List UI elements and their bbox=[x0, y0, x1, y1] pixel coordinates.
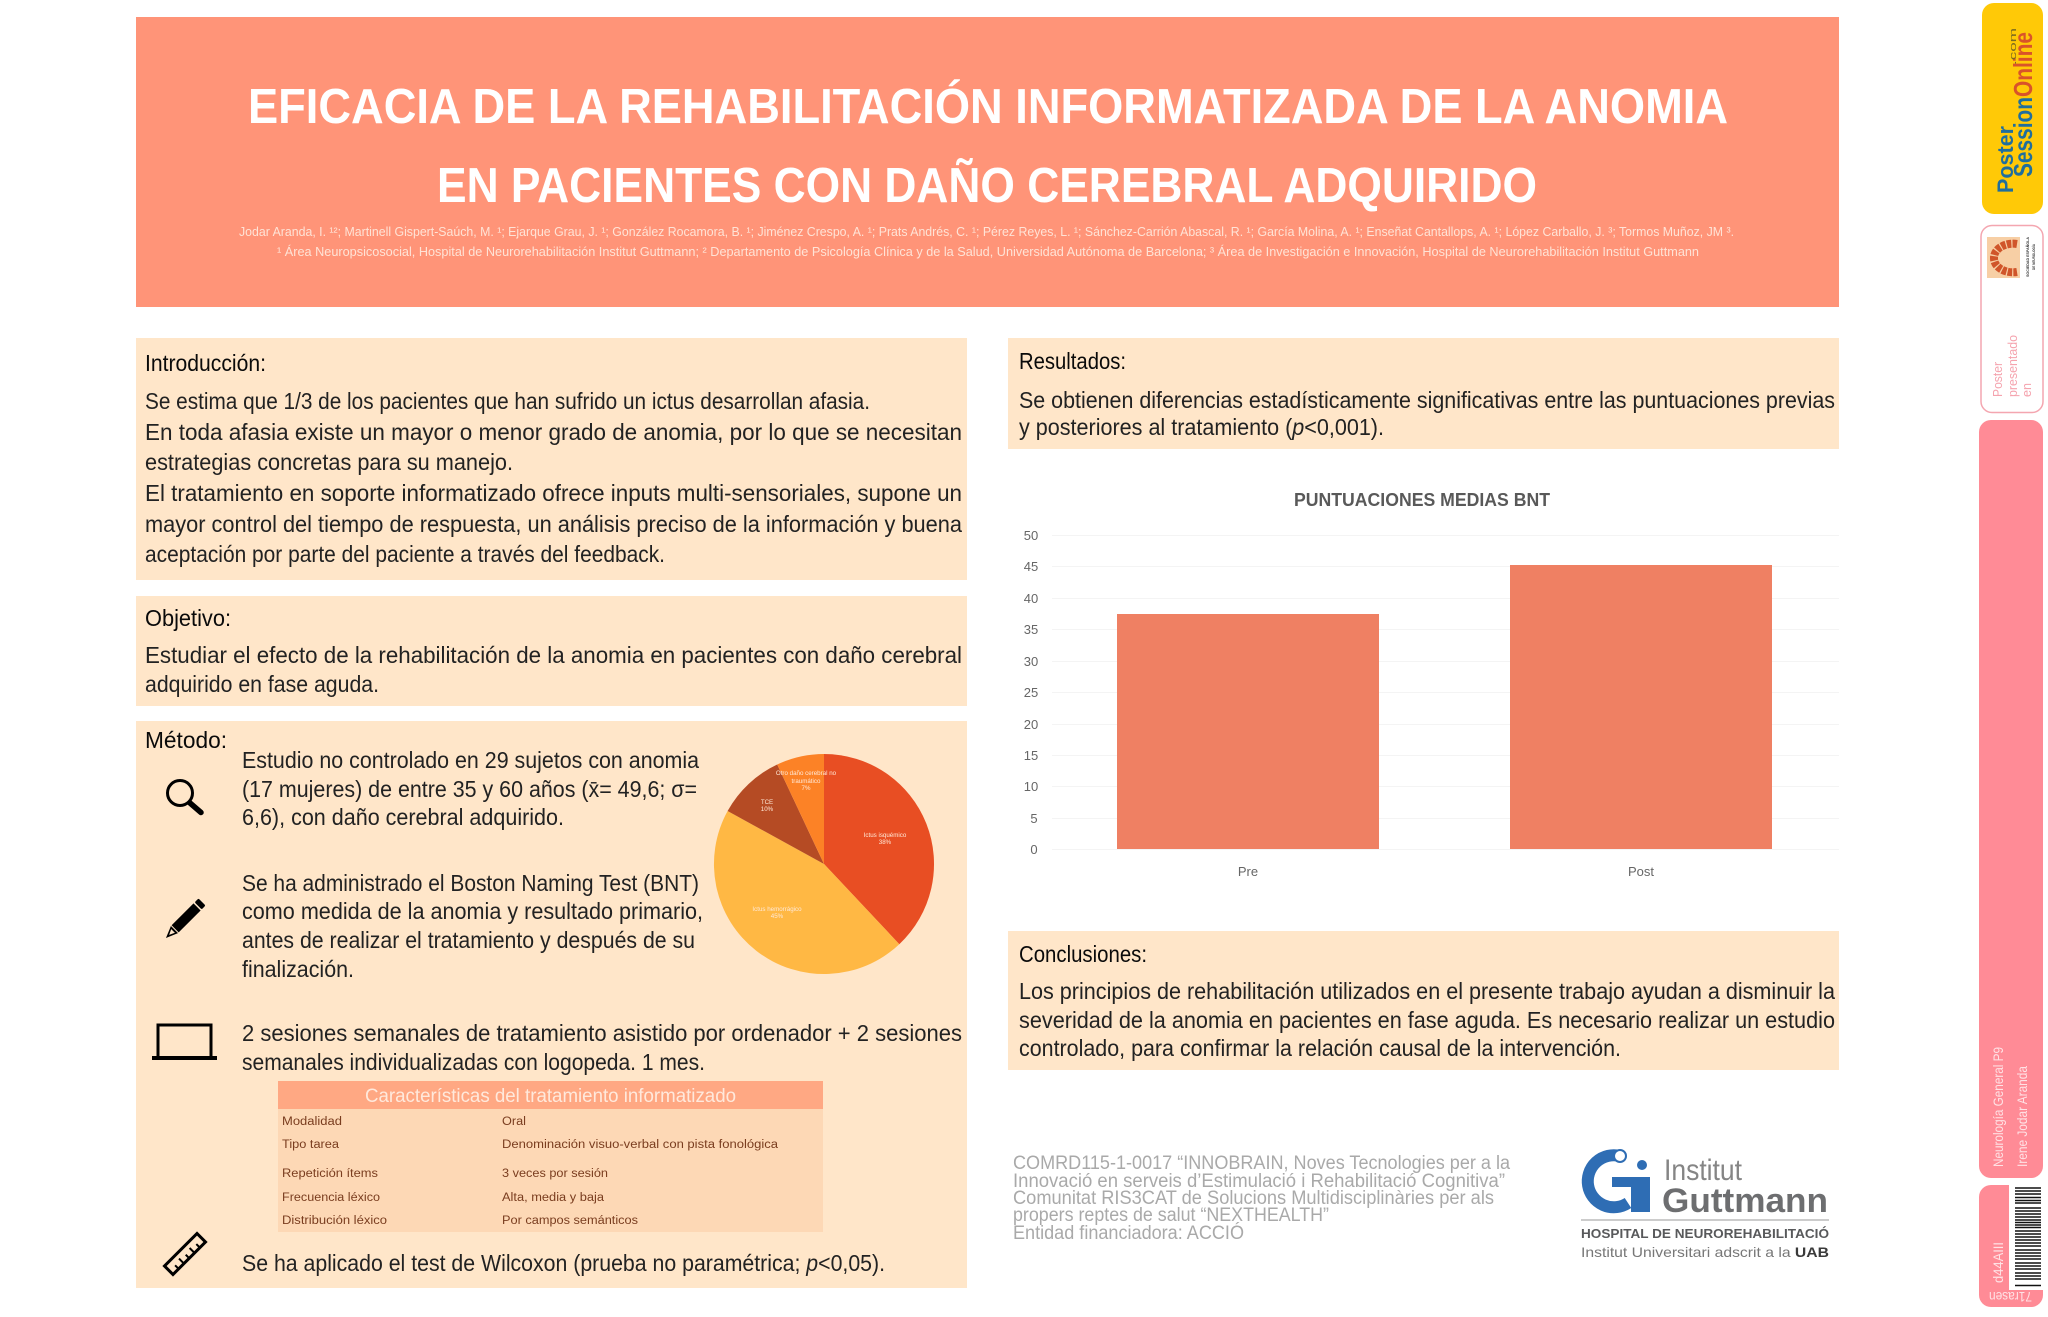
text: boston naming test bbox=[242, 870, 703, 982]
table: características del tratamiento: Frecuencia léxico bbox=[282, 1192, 380, 1204]
text: introducción: mayor control del tiempo de respuesta, un análisis preciso de la información y buena bbox=[145, 511, 962, 537]
pie chart: etiología: 38% bbox=[879, 839, 892, 846]
pie chart: etiología: Otro daño cerebral no bbox=[776, 770, 837, 777]
text: conclusiones: Los principios de rehabilitación utilizados en el presente trabajo ayudan a disminuir la bbox=[1019, 978, 1835, 1004]
title: EN PACIENTES CON DAÑO CEREBRAL ADQUIRIDO bbox=[437, 159, 1537, 213]
table: características del tratamiento: Repetición ítems bbox=[282, 1168, 378, 1180]
sidebar: poster presentado en: en bbox=[2019, 383, 2034, 397]
y axis labels: 15 bbox=[1024, 748, 1038, 763]
funding text bbox=[1013, 1153, 1510, 1244]
funding text: propers reptes de salut “NEXTHEALTH” bbox=[1013, 1205, 1329, 1226]
sidebar: poster session online logo: Session bbox=[2008, 97, 2038, 177]
text: introducción: El tratamiento en soporte informatizado ofrece inputs multi-sensoriales, supone un bbox=[145, 480, 962, 506]
sidebar: session and author bbox=[1979, 420, 2043, 1178]
text: introducción: En toda afasia existe un mayor o menor grado de anomia, por lo que se necesitan bbox=[145, 419, 962, 445]
text: sesiones bbox=[242, 1020, 962, 1075]
bar chart: puntuaciones medias BNT: Post bbox=[1628, 864, 1654, 879]
text: sesiones: semanales individualizadas con logopeda. 1 mes. bbox=[242, 1049, 705, 1075]
funding text: Entidad financiadora: ACCIÓ bbox=[1013, 1222, 1244, 1244]
table: características del tratamiento: Por campos semánticos bbox=[502, 1215, 638, 1227]
sidebar: barcode tag: 71rasen bbox=[1989, 1289, 2032, 1305]
y axis labels: 35 bbox=[1024, 622, 1038, 637]
logo: Institut Guttmann: HOSPITAL DE NEUROREHABILITACIÓ bbox=[1581, 1226, 1829, 1241]
text: conclusiones: severidad de la anomia en pacientes en fase aguda. Es necesario realizar un estudio bbox=[1019, 1007, 1835, 1033]
text: wilcoxon: Se ha aplicado el test de Wilcoxon (prueba no paramétrica; p<0,05). bbox=[242, 1250, 885, 1276]
funding text: Comunitat RIS3CAT de Solucions Multidisciplinàries per als bbox=[1013, 1188, 1494, 1209]
text: sujetos: (17 mujeres) de entre 35 y 60 años (x̄= 49,6; σ= bbox=[242, 776, 697, 802]
text: boston naming test: finalización. bbox=[242, 956, 354, 982]
logo: Institut Guttmann: Institut bbox=[1664, 1154, 1743, 1187]
title bbox=[248, 79, 1728, 213]
text: conclusiones: controlado, para confirmar la relación causal de la intervención. bbox=[1019, 1035, 1621, 1061]
icon: brain society logo: DE NEUROLOGÍA bbox=[2031, 244, 2036, 270]
pie chart: etiología bbox=[714, 754, 934, 974]
text: resultados bbox=[1019, 387, 1835, 440]
heading: conclusiones: Conclusiones: bbox=[1019, 941, 1147, 967]
text: boston naming test: Se ha administrado el Boston Naming Test (BNT) bbox=[242, 870, 699, 896]
text: conclusiones bbox=[1019, 978, 1835, 1061]
sidebar: barcode tag: d44AIII bbox=[1990, 1242, 2006, 1283]
heading: método: Método: bbox=[145, 727, 227, 753]
pie chart: etiología: Ictus hemorrágico bbox=[752, 906, 802, 913]
table: características del tratamiento: Modalidad bbox=[282, 1116, 342, 1128]
text: boston naming test: como medida de la anomia y resultado primario, bbox=[242, 898, 703, 924]
text: resultados: y posteriores al tratamiento (p<0,001). bbox=[1019, 414, 1384, 440]
table: características del tratamiento bbox=[278, 1081, 823, 1232]
pie chart: etiología: 7% bbox=[802, 785, 811, 792]
authors and affiliations: ¹ Área Neuropsicosocial, Hospital de Neurorehabilitación Institut Guttmann; ² Departamento de Psicología Clínica y de la Salud, Universidad Autónoma de Barcelona; ³ Área de Investigación e Innovación, Hospital de Neurorehabilitación Institut Guttmann bbox=[277, 244, 1699, 259]
table: características del tratamiento: Denominación visuo-verbal con pista fonológica bbox=[502, 1139, 779, 1151]
sidebar: poster session online logo: Poster bbox=[1993, 126, 2018, 193]
y axis labels: 20 bbox=[1024, 717, 1038, 732]
table: características del tratamiento: Alta, media y baja bbox=[502, 1192, 605, 1204]
table: características del tratamiento: 3 veces por sesión bbox=[502, 1168, 608, 1180]
panel: método bbox=[136, 721, 967, 1288]
icon: brain society logo: SOCIEDAD ESPAÑOLA bbox=[2025, 237, 2030, 277]
sidebar: barcode tag bbox=[1979, 1185, 2043, 1307]
y axis labels: 25 bbox=[1024, 685, 1038, 700]
logo: Institut Guttmann: Guttmann bbox=[1662, 1182, 1828, 1220]
heading: introducción: Introducción: bbox=[145, 350, 266, 376]
panel: resultados bbox=[1008, 338, 1839, 449]
panel: objetivo bbox=[136, 596, 967, 706]
icon: laptop bbox=[152, 1025, 217, 1060]
y axis labels: 0 bbox=[1030, 842, 1038, 857]
text: introducción: estrategias concretas para su manejo. bbox=[145, 449, 513, 475]
panel: introducción bbox=[136, 338, 967, 580]
sidebar: poster presentado en: Poster bbox=[1990, 361, 2005, 397]
bar: pre bbox=[1117, 614, 1379, 849]
icon: magnifier bbox=[168, 780, 201, 812]
y axis labels: 50 bbox=[1024, 528, 1038, 543]
icon: pencil bbox=[162, 898, 206, 942]
y axis labels bbox=[1024, 528, 1038, 857]
authors and affiliations bbox=[239, 225, 1734, 259]
y axis labels: 45 bbox=[1024, 559, 1038, 574]
title: EFICACIA DE LA REHABILITACIÓN INFORMATIZADA DE LA ANOMIA bbox=[248, 79, 1728, 134]
sidebar: poster presentado en bbox=[1981, 226, 2043, 412]
pie chart: etiología: 10% bbox=[761, 806, 774, 813]
text: sujetos: 6,6), con daño cerebral adquirido. bbox=[242, 804, 564, 830]
sidebar: poster session online logo bbox=[1982, 3, 2043, 214]
logo: Institut Guttmann bbox=[1581, 1150, 1829, 1260]
text: sesiones: 2 sesiones semanales de tratamiento asistido por ordenador + 2 sesiones bbox=[242, 1020, 962, 1046]
icon: brain society logo bbox=[1987, 237, 2036, 278]
bar chart: puntuaciones medias BNT bbox=[1024, 489, 1839, 879]
text: sujetos bbox=[242, 747, 699, 830]
table: características del tratamiento: Tipo tarea bbox=[282, 1139, 340, 1151]
funding text: COMRD115-1-0017 “INNOBRAIN, Noves Tecnologies per a la bbox=[1013, 1153, 1510, 1174]
sidebar: poster session online logo: Online bbox=[2008, 32, 2038, 97]
table: características del tratamiento: Oral bbox=[502, 1116, 526, 1128]
pie chart: etiología: TCE bbox=[761, 799, 773, 806]
pie chart: etiología: traumático bbox=[792, 778, 821, 785]
logo: Institut Guttmann: Institut Universitari adscrit a la UAB bbox=[1581, 1244, 1829, 1260]
text: objetivo: Estudiar el efecto de la rehabilitación de la anomia en pacientes con daño cerebral bbox=[145, 642, 962, 668]
text: boston naming test: antes de realizar el tratamiento y después de su bbox=[242, 927, 695, 953]
heading: resultados: Resultados: bbox=[1019, 348, 1126, 374]
sidebar: poster presentado en: presentado bbox=[2005, 335, 2020, 397]
y axis labels: 40 bbox=[1024, 591, 1038, 606]
text: objetivo: adquirido en fase aguda. bbox=[145, 671, 379, 697]
icon: ruler bbox=[164, 1233, 206, 1275]
barcode bbox=[2015, 1188, 2041, 1286]
text: sujetos: Estudio no controlado en 29 sujetos con anomia bbox=[242, 747, 699, 773]
funding text: Innovació en serveis d’Estimulació i Rehabilitació Cognitiva” bbox=[1013, 1171, 1505, 1192]
text: objetivo bbox=[145, 642, 962, 697]
pie chart: etiología: Ictus isquémico bbox=[864, 832, 907, 839]
text: resultados: Se obtienen diferencias estadísticamente significativas entre las puntuaciones previas bbox=[1019, 387, 1835, 413]
table: características del tratamiento: Características del tratamiento informatizado bbox=[365, 1086, 736, 1107]
y axis labels: 5 bbox=[1030, 811, 1038, 826]
bar chart: puntuaciones medias BNT: Pre bbox=[1238, 864, 1258, 879]
y axis labels: 10 bbox=[1024, 779, 1038, 794]
authors and affiliations: Jodar Aranda, I. ¹²; Martinell Gispert-Saúch, M. ¹; Ejarque Grau, J. ¹; González Rocamora, B. ¹; Jiménez Crespo, A. ¹; Prats Andrés, C. ¹; Pérez Reyes, L. ¹; Sánchez-Carrión Abascal, R. ¹; García Molina, A. ¹; Enseñat Cantallops, A. ¹; López Carballo, J. ³; Tormos Muñoz, JM ³. bbox=[239, 225, 1734, 239]
bar: post bbox=[1510, 565, 1772, 849]
sidebar: session and author: Neurología General P9 bbox=[1990, 1047, 2006, 1167]
heading: objetivo: Objetivo: bbox=[145, 605, 231, 631]
pie chart: etiología: 45% bbox=[771, 913, 784, 920]
chart title: PUNTUACIONES MEDIAS BNT bbox=[1294, 489, 1551, 510]
text: introducción: aceptación por parte del paciente a través del feedback. bbox=[145, 541, 665, 567]
table: características del tratamiento: Distribución léxico bbox=[282, 1215, 387, 1227]
header banner bbox=[136, 17, 1839, 307]
text: introducción: Se estima que 1/3 de los pacientes que han sufrido un ictus desarrollan afasia. bbox=[145, 388, 870, 414]
y axis labels: 30 bbox=[1024, 654, 1038, 669]
sidebar: session and author: Irene Jodar Aranda bbox=[2014, 1066, 2030, 1167]
panel: conclusiones bbox=[1008, 931, 1839, 1070]
sidebar: poster session online logo: .com bbox=[2008, 28, 2018, 65]
text: introducción bbox=[145, 388, 962, 567]
